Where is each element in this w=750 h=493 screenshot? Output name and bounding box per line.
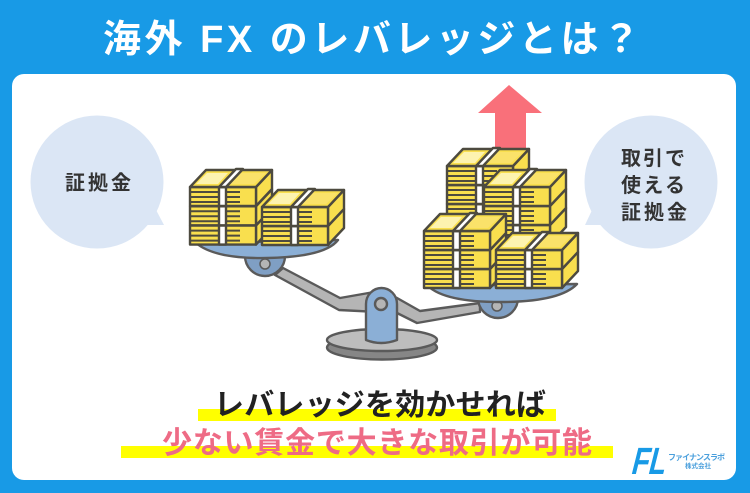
highlight bar 2 [121, 446, 613, 458]
title: 海外 FX のレバレッジとは？ [103, 19, 640, 61]
right plate [428, 284, 577, 302]
money: right front-right stack [496, 232, 578, 288]
scale beam [275, 268, 480, 323]
money: left short stack [262, 189, 344, 245]
logo: ファイナンスラボ [668, 452, 725, 462]
panel: main [12, 74, 736, 480]
speech bubble: tradable margin: 取引で [621, 147, 685, 170]
money: right middle stack [484, 169, 566, 244]
speech bubble: tradable margin [584, 116, 718, 248]
caption line 1: レバレッジを効かせれば [214, 389, 546, 422]
caption line 2: 少ない賃金で大きな取引が可能 [162, 426, 592, 460]
logo: 株式会社 [685, 461, 712, 470]
left plate [196, 240, 338, 258]
speech bubble: tradable margin: 証拠金 [621, 201, 687, 224]
money: right front-left stack [424, 213, 506, 288]
scale [196, 240, 577, 360]
left hub [245, 256, 285, 276]
logo [628, 441, 725, 483]
logo: FL [628, 441, 672, 483]
right hub [478, 298, 518, 318]
arrow: up [478, 85, 542, 160]
scale base [327, 329, 437, 360]
speech bubble: tradable margin: 使える [621, 174, 685, 197]
speech bubble: margin [30, 116, 164, 248]
money: right back stack [447, 148, 529, 223]
highlight bar 1 [198, 409, 556, 421]
scale pillar [366, 288, 397, 343]
speech bubble: margin: 証拠金 [65, 172, 131, 194]
money: left tall stack [190, 169, 272, 245]
